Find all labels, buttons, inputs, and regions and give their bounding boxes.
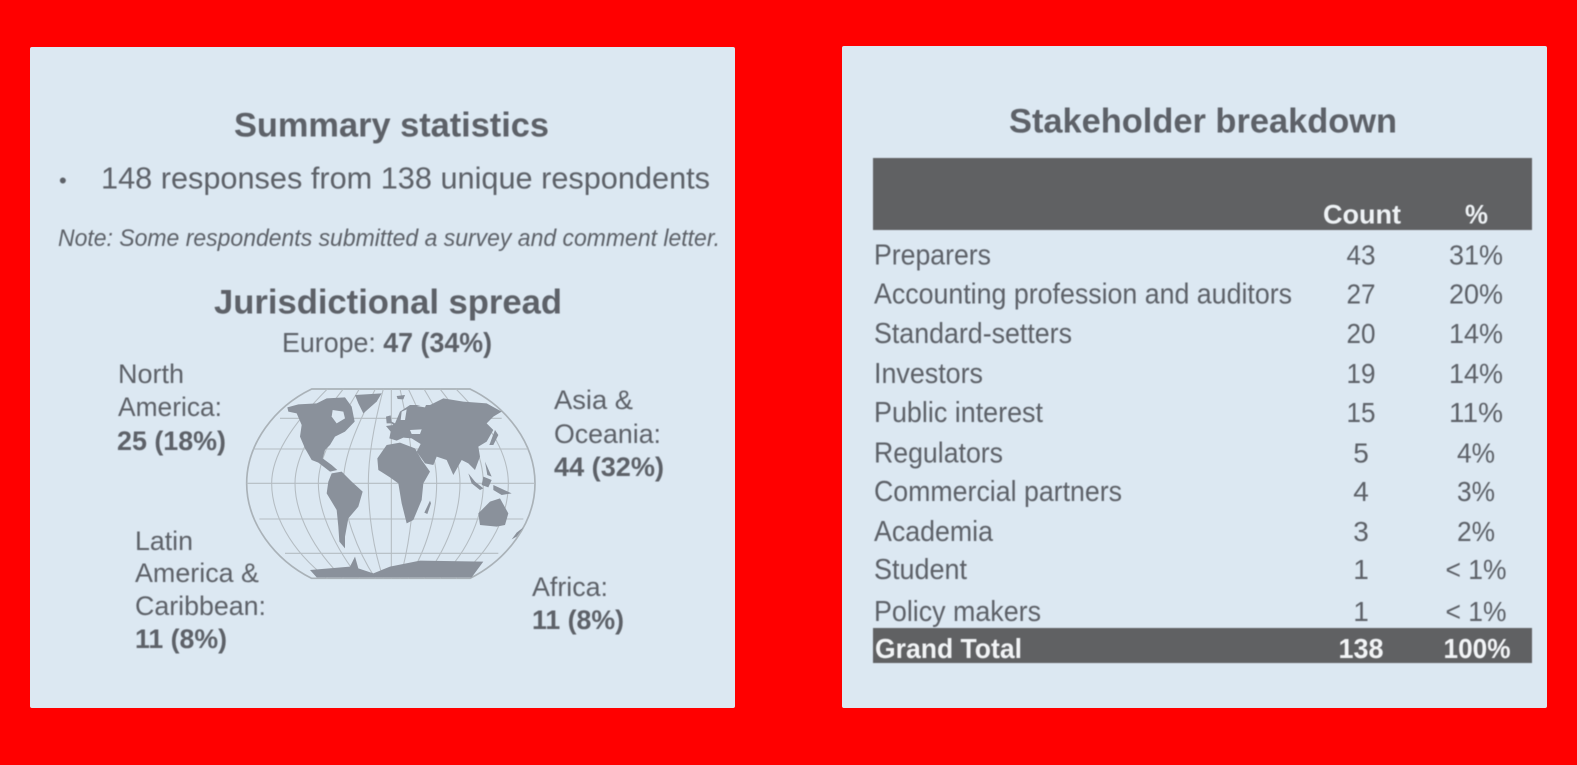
row: Standard-setters bbox=[874, 318, 1503, 350]
North America bbox=[287, 397, 355, 472]
label: Latin America and Caribbean: 11 (8%) bbox=[135, 624, 227, 654]
label: North America bbox=[117, 359, 226, 456]
row: Standard-setters: Standard-setters bbox=[874, 318, 1072, 350]
bullet: responses: • bbox=[59, 168, 67, 193]
row: Preparers: 31% bbox=[1449, 240, 1503, 270]
row: Accounting profession and auditors: 20% bbox=[1449, 278, 1503, 310]
South America bbox=[327, 472, 363, 548]
Africa bbox=[377, 443, 430, 523]
icon: world map bbox=[247, 389, 535, 578]
row: Regulators: 5 bbox=[1353, 438, 1369, 468]
row: Policy makers bbox=[874, 596, 1506, 628]
row: Policy makers: < 1% bbox=[1446, 596, 1506, 627]
Australia bbox=[478, 498, 508, 527]
table header: % bbox=[1465, 200, 1488, 230]
row: Preparers: Preparers bbox=[874, 240, 991, 272]
note: Note: Some respondents submitted a survey and comment letter. bbox=[58, 225, 720, 252]
row: Grand Total: Grand Total bbox=[875, 633, 1022, 664]
panel: stakeholder breakdown bbox=[842, 46, 1547, 708]
label: Asia and Oceania: Oceania: bbox=[554, 419, 661, 449]
row: Academia bbox=[874, 516, 1495, 548]
bullet: responses: 148 responses from 138 unique respondents bbox=[101, 160, 710, 196]
row: Student bbox=[874, 554, 1506, 586]
row: Grand Total: 100% bbox=[1444, 633, 1511, 664]
label: Africa: Africa: bbox=[532, 572, 608, 602]
Eurasia bbox=[386, 398, 502, 475]
row: Academia: Academia bbox=[874, 516, 993, 548]
table header: Count bbox=[1323, 200, 1401, 230]
row: Public interest: Public interest bbox=[874, 397, 1043, 429]
label: Latin America and Caribbean bbox=[135, 526, 266, 654]
row: Academia: 3 bbox=[1353, 516, 1369, 547]
heading: jurisdictional spread: Jurisdictional spread bbox=[214, 284, 562, 322]
label: Latin America and Caribbean: Latin bbox=[135, 526, 193, 556]
row: Regulators: Regulators bbox=[874, 438, 1003, 470]
label: Asia and Oceania bbox=[554, 385, 664, 482]
row: Public interest bbox=[874, 397, 1503, 429]
row: Accounting profession and auditors: 27 bbox=[1346, 278, 1376, 310]
row: Policy makers: 1 bbox=[1353, 596, 1369, 627]
row: Public interest: 11% bbox=[1449, 397, 1503, 428]
label: North America: North bbox=[118, 359, 184, 389]
label: Latin America and Caribbean: Caribbean: bbox=[135, 591, 266, 621]
label: Europe: Europe: 47 (34%) bbox=[282, 327, 492, 358]
row: Policy makers: Policy makers bbox=[874, 596, 1041, 628]
heading: stakeholder breakdown: Stakeholder breakdown bbox=[1009, 102, 1397, 140]
row: Accounting profession and auditors: Accounting profession and auditors bbox=[874, 278, 1292, 310]
row: Preparers bbox=[874, 240, 1503, 272]
row: Investors: Investors bbox=[874, 358, 983, 390]
row: Investors: 19 bbox=[1346, 358, 1376, 389]
Greenland bbox=[355, 393, 382, 413]
row: Regulators: 4% bbox=[1457, 438, 1495, 468]
label: Asia and Oceania: Asia & bbox=[554, 385, 633, 415]
row: Grand Total bbox=[873, 628, 1532, 664]
row: Regulators bbox=[874, 438, 1495, 470]
label: Latin America and Caribbean: America & bbox=[135, 558, 259, 588]
row: Commercial partners: 4 bbox=[1353, 476, 1369, 507]
row: Standard-setters: 20 bbox=[1346, 318, 1376, 349]
label: Asia and Oceania: 44 (32%) bbox=[554, 452, 664, 482]
row: Student: < 1% bbox=[1446, 554, 1506, 585]
row: Commercial partners bbox=[874, 476, 1495, 508]
label: Africa: 11 (8%) bbox=[532, 605, 624, 635]
Japan bbox=[489, 430, 498, 445]
New Zealand bbox=[512, 527, 523, 539]
label: Africa bbox=[532, 572, 624, 635]
table header bbox=[873, 158, 1532, 230]
Antarctica bbox=[310, 557, 483, 577]
row: Standard-setters: 14% bbox=[1449, 318, 1503, 349]
UK and Iceland bbox=[386, 395, 405, 423]
row: Grand Total: 138 bbox=[1338, 633, 1384, 664]
row: Student: Student bbox=[874, 554, 967, 586]
Southeast Asia islands bbox=[468, 462, 512, 495]
panel: summary statistics bbox=[30, 47, 735, 708]
label: North America: America: bbox=[118, 392, 222, 422]
Madagascar bbox=[424, 501, 431, 514]
label: North America: 25 (18%) bbox=[117, 426, 226, 456]
row: Academia: 2% bbox=[1457, 516, 1495, 547]
heading: summary statistics: Summary statistics bbox=[234, 106, 549, 144]
row: Preparers: 43 bbox=[1346, 240, 1376, 270]
inland water bbox=[332, 403, 427, 434]
row: Commercial partners: 3% bbox=[1457, 476, 1495, 507]
row: Student: 1 bbox=[1353, 554, 1369, 585]
row: Public interest: 15 bbox=[1346, 397, 1376, 428]
row: Commercial partners: Commercial partners bbox=[874, 476, 1122, 508]
row: Investors bbox=[874, 358, 1503, 390]
row: Investors: 14% bbox=[1449, 358, 1503, 389]
